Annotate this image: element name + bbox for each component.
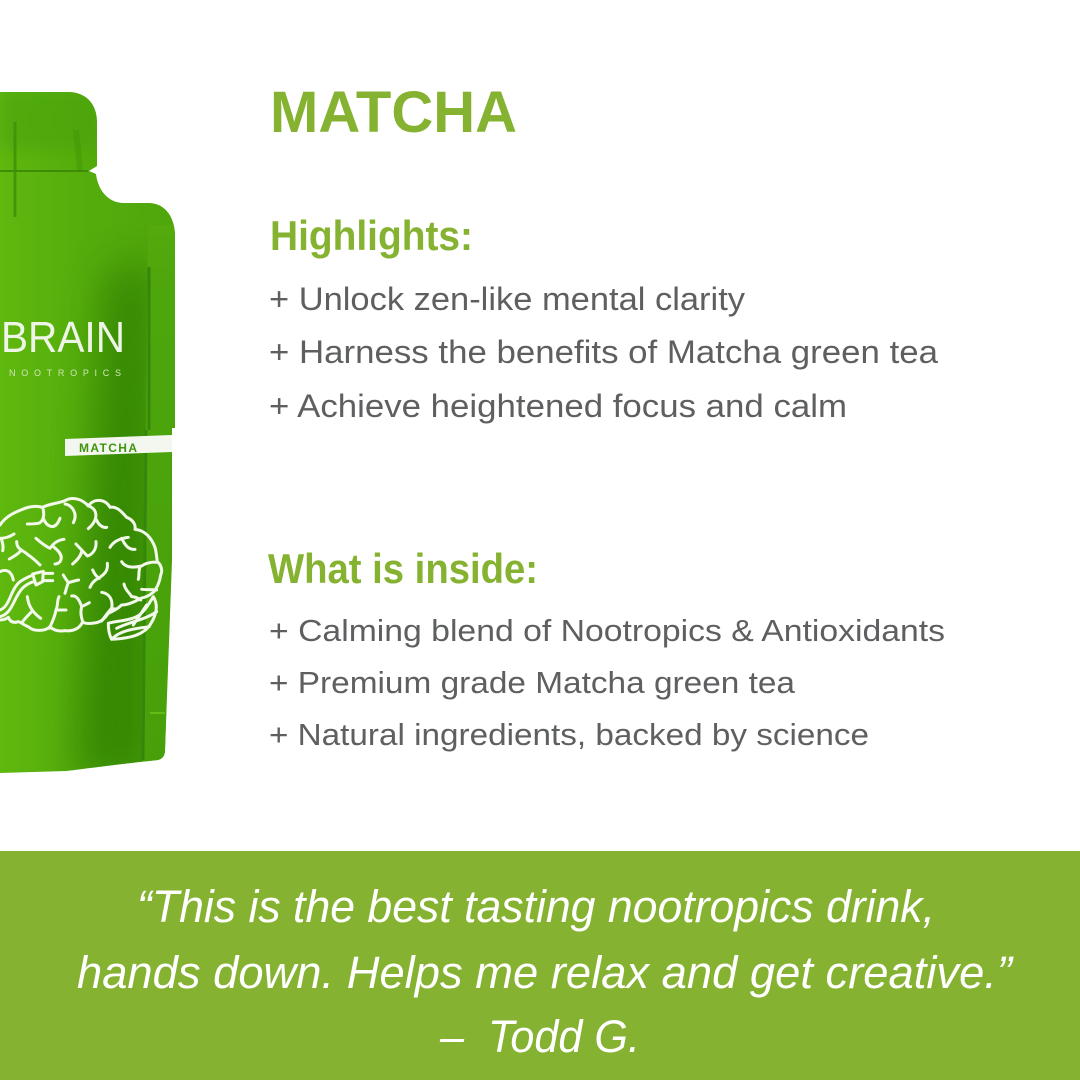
- pouch body: [0, 90, 180, 780]
- testimonial quote: [77, 881, 1014, 1062]
- testimonial quote: “This is the best tasting nootropics drink,: [137, 881, 935, 932]
- icon: brain with plug and leaf: [0, 499, 162, 639]
- ingredients list: [269, 613, 945, 752]
- testimonial quote: hands down. Helps me relax and get creative.”: [77, 947, 1014, 998]
- panel: testimonial band: [0, 851, 1080, 1080]
- product pouch: [0, 90, 180, 780]
- ingredients list: + Calming blend of Nootropics & Antioxidants: [269, 613, 945, 648]
- highlights list: + Achieve heightened focus and calm: [269, 388, 847, 424]
- highlights list: + Harness the benefits of Matcha green tea: [269, 334, 938, 370]
- heading: what is inside: What is inside:: [268, 545, 538, 592]
- panel: what is inside: [268, 545, 945, 752]
- ingredients list: + Natural ingredients, backed by science: [269, 717, 869, 752]
- highlights list: + Unlock zen-like mental clarity: [269, 281, 745, 317]
- panel: highlights: [269, 212, 938, 424]
- pouch brand text: BRAIN: [1, 313, 125, 362]
- ingredients list: + Premium grade Matcha green tea: [269, 665, 796, 700]
- pouch subtitle: NOOTROPICS: [9, 368, 121, 378]
- testimonial quote: – Todd G.: [439, 1011, 640, 1062]
- pouch flavour label: [65, 435, 172, 456]
- highlights list: [269, 281, 938, 424]
- pouch flavour label: MATCHA: [79, 441, 137, 455]
- title: MATCHA: [270, 80, 517, 145]
- heading: highlights: Highlights:: [270, 212, 473, 259]
